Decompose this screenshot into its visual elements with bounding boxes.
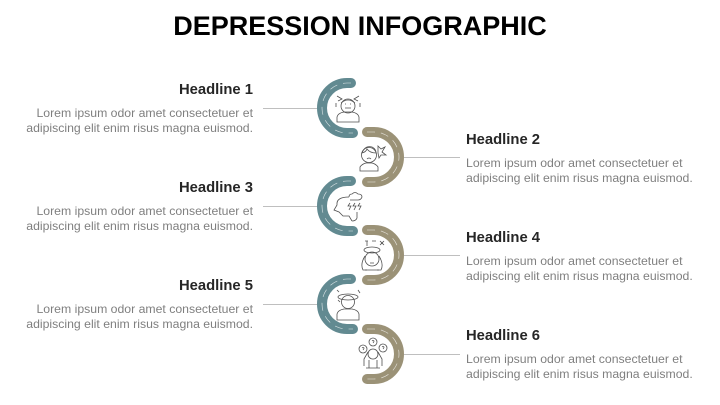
- arc 5 teal: [322, 279, 353, 329]
- text block: headline 1: adipiscing elit enim risus magna euismod.: [26, 120, 253, 134]
- connector lines: [263, 108, 460, 354]
- text block: headline 6: Lorem ipsum odor amet consectetuer et: [466, 352, 683, 366]
- text block: headline 2: [466, 132, 693, 184]
- text block: headline 5: [26, 278, 253, 330]
- text block: headline 4: Lorem ipsum odor amet consectetuer et: [466, 254, 683, 268]
- arc 2 tan: [367, 132, 399, 182]
- text block: headline 6: Headline 6: [466, 328, 540, 344]
- text block: headline 1: [26, 82, 253, 134]
- text block: headline 1: Lorem ipsum odor amet consectetuer et: [36, 106, 253, 120]
- text block: headline 3: Lorem ipsum odor amet consectetuer et: [36, 204, 253, 218]
- icon: sad person with stress mark: [360, 146, 386, 171]
- text block: headline 5: adipiscing elit enim risus magna euismod.: [26, 316, 253, 330]
- icon: head with storm cloud: [334, 192, 362, 221]
- icon: woman with symbols and halo: [362, 241, 384, 270]
- text block: headline 4: adipiscing elit enim risus magna euismod.: [466, 268, 693, 282]
- arc 6 tan: [367, 329, 399, 379]
- text block: headline 2: adipiscing elit enim risus magna euismod.: [466, 170, 693, 184]
- icon: dizzy person: [337, 290, 360, 320]
- icon: person surrounded by question marks: [359, 338, 387, 368]
- text block: headline 5: Lorem ipsum odor amet consectetuer et: [36, 302, 253, 316]
- arc 1 teal: [322, 83, 353, 133]
- title: DEPRESSION INFOGRAPHIC: [173, 11, 547, 41]
- arc 4 tan: [367, 230, 399, 280]
- text block: headline 3: adipiscing elit enim risus magna euismod.: [26, 218, 253, 232]
- text block: headline 1: Headline 1: [179, 82, 253, 98]
- text block: headline 2: Lorem ipsum odor amet consectetuer et: [466, 156, 683, 170]
- text block: headline 6: adipiscing elit enim risus magna euismod.: [466, 366, 693, 380]
- text block: headline 4: Headline 4: [466, 230, 540, 246]
- arc 3 teal: [322, 181, 353, 231]
- text block: headline 6: [466, 328, 693, 380]
- text block: headline 4: [466, 230, 693, 282]
- text block: headline 2: Headline 2: [466, 132, 540, 148]
- text block: headline 3: [26, 180, 253, 232]
- text block: headline 3: Headline 3: [179, 180, 253, 196]
- icon: person with headache: [336, 96, 360, 122]
- text block: headline 5: Headline 5: [179, 278, 253, 294]
